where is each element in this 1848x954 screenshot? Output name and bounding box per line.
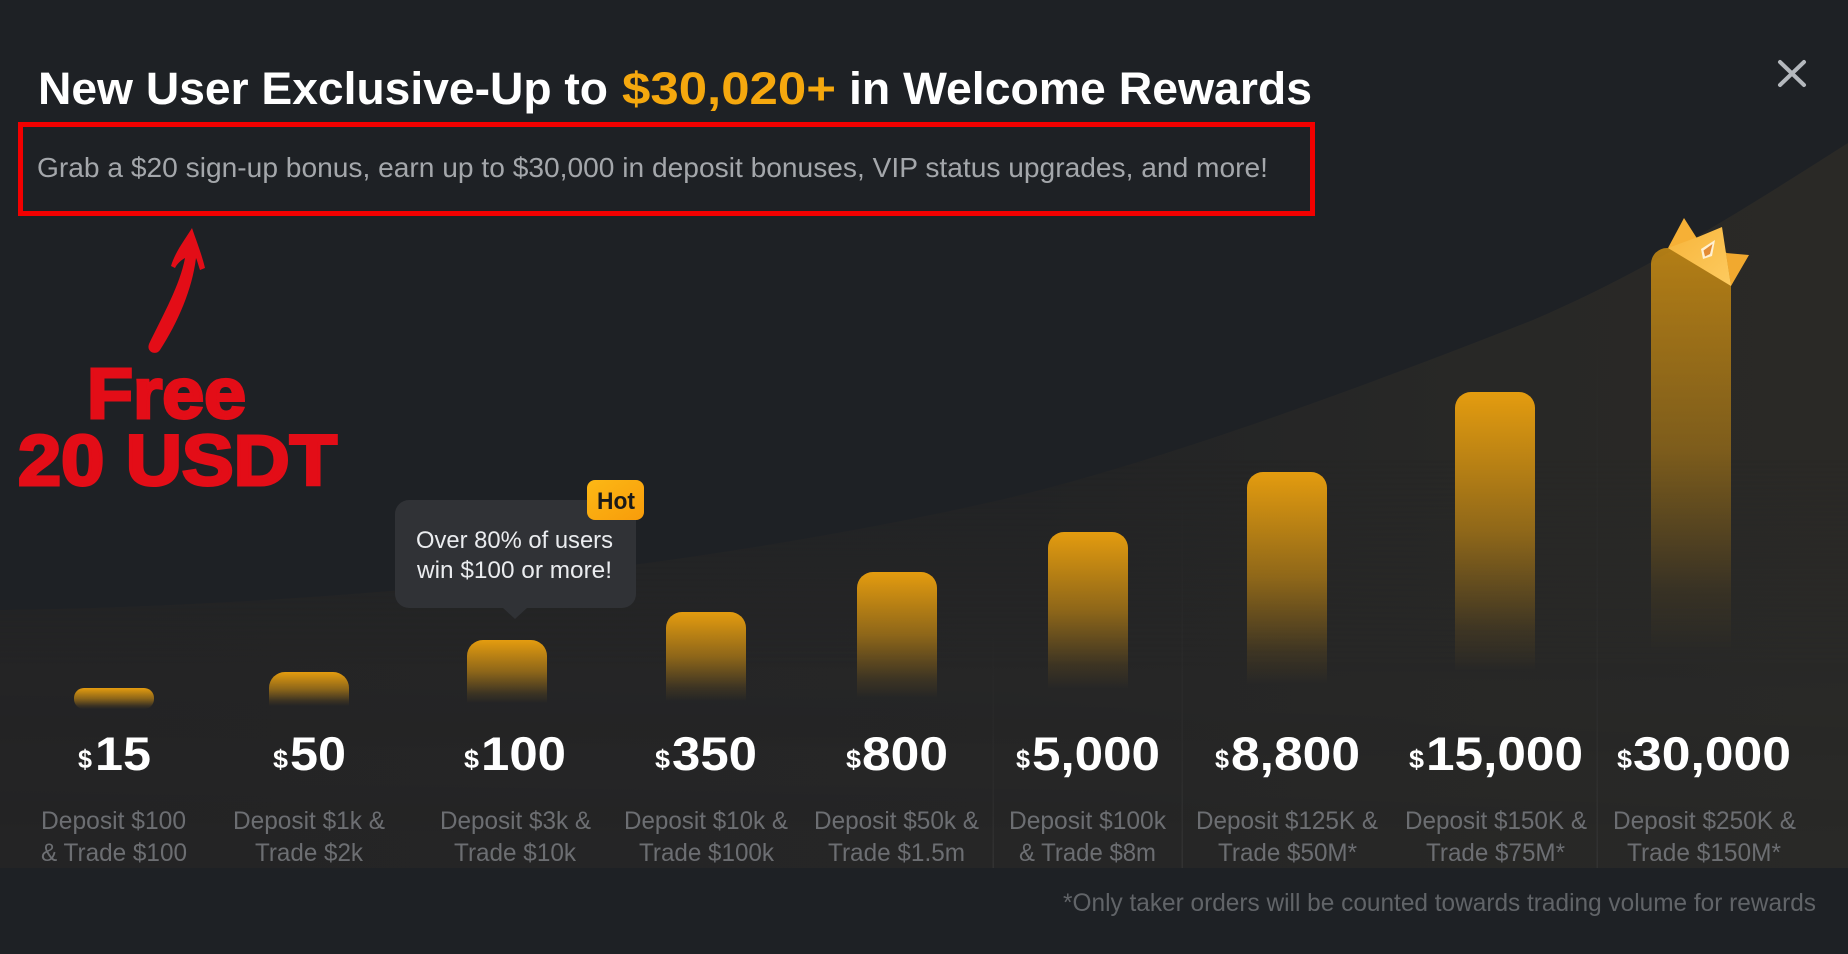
icon: crown <box>1668 218 1749 286</box>
footnote: *Only taker orders will be counted towards trading volume for rewards <box>1063 889 1816 917</box>
title: in Welcome Rewards <box>849 63 1312 114</box>
tier 3: 100 <box>481 727 566 780</box>
tooltip: Over 80% of users <box>416 527 613 554</box>
tier 8: 15,000 <box>1426 727 1583 780</box>
tier 6 <box>1009 727 1166 867</box>
tier 6: $ <box>1016 744 1031 774</box>
column dividers <box>992 320 1598 868</box>
bar: $8,800 <box>1247 472 1327 684</box>
tier 7: Trade $50M* <box>1218 839 1357 867</box>
icon: close <box>1780 62 1804 85</box>
tier 2: 50 <box>290 727 346 780</box>
bar chart <box>74 248 1731 709</box>
tier 7 <box>1196 727 1378 867</box>
callout: Free 20 USDT: Free <box>87 355 246 434</box>
title: New User Exclusive-Up to <box>38 63 608 114</box>
tooltip <box>395 500 636 619</box>
callout: Free 20 USDT <box>18 355 337 501</box>
subtitle: Grab a $20 sign-up bonus, earn up to $30,000 in deposit bonuses, VIP status upgrades, and more! <box>37 152 1268 183</box>
bar: $15 <box>74 688 154 709</box>
tier 2 <box>233 727 385 867</box>
tier 8: $ <box>1409 744 1425 774</box>
tier 8: Deposit $150K & <box>1405 807 1587 835</box>
tier 3: Trade $10k <box>454 839 576 867</box>
arrow: pointing to subtitle <box>148 228 205 353</box>
tier 6: & Trade $8m <box>1019 839 1156 867</box>
tier 5: Deposit $50k & <box>814 807 979 835</box>
bar: $350 <box>666 612 746 701</box>
tier 5 <box>814 727 979 867</box>
tier 5: $ <box>846 744 862 774</box>
tier 4: Deposit $10k & <box>624 807 788 835</box>
tier 9: 30,000 <box>1633 727 1791 780</box>
bar: $30,000 <box>1651 248 1731 652</box>
tier 3: $ <box>464 744 480 774</box>
tier 5: Trade $1.5m <box>828 839 965 867</box>
tier 6: 5,000 <box>1032 727 1160 780</box>
title <box>38 63 1312 114</box>
bar: $800 <box>857 572 937 698</box>
curved chart backdrop <box>1112 143 1848 868</box>
tier 8 <box>1405 727 1587 867</box>
tier 4: 350 <box>672 727 757 780</box>
tooltip: win $100 or more! <box>416 557 612 584</box>
tier 1: $ <box>78 744 93 774</box>
tier 7: $ <box>1215 744 1230 774</box>
tier 6: Deposit $100k <box>1009 807 1166 835</box>
bar: $5,000 <box>1048 532 1128 689</box>
tier 9: $ <box>1617 744 1633 774</box>
title: $30,020+ <box>622 63 836 114</box>
bar: $100 <box>467 640 547 703</box>
tier 1: Deposit $100 <box>41 807 186 835</box>
tier 1: & Trade $100 <box>41 839 187 867</box>
bar: $50 <box>269 672 349 706</box>
bar: $15,000 <box>1455 392 1535 671</box>
tier 2: Trade $2k <box>255 839 363 867</box>
tier 4: Trade $100k <box>639 839 774 867</box>
tier 9 <box>1613 727 1796 867</box>
tier 3 <box>440 727 591 867</box>
tier 2: Deposit $1k & <box>233 807 385 835</box>
hot badge <box>587 480 644 520</box>
hot badge: Hot <box>597 488 635 515</box>
tier 2: $ <box>273 744 289 774</box>
callout: Free 20 USDT: 20 USDT <box>18 422 337 501</box>
tier 3: Deposit $3k & <box>440 807 591 835</box>
tier 4: $ <box>655 744 671 774</box>
tier 7: 8,800 <box>1231 727 1360 780</box>
subtitle highlight box <box>20 124 1312 214</box>
tier 9: Deposit $250K & <box>1613 807 1796 835</box>
tier 4 <box>624 727 788 867</box>
tier 1 <box>41 727 187 867</box>
tier 9: Trade $150M* <box>1627 839 1781 867</box>
tier 1: 15 <box>95 727 151 780</box>
tier 5: 800 <box>862 727 948 780</box>
tier 7: Deposit $125K & <box>1196 807 1378 835</box>
tier 8: Trade $75M* <box>1426 839 1565 867</box>
